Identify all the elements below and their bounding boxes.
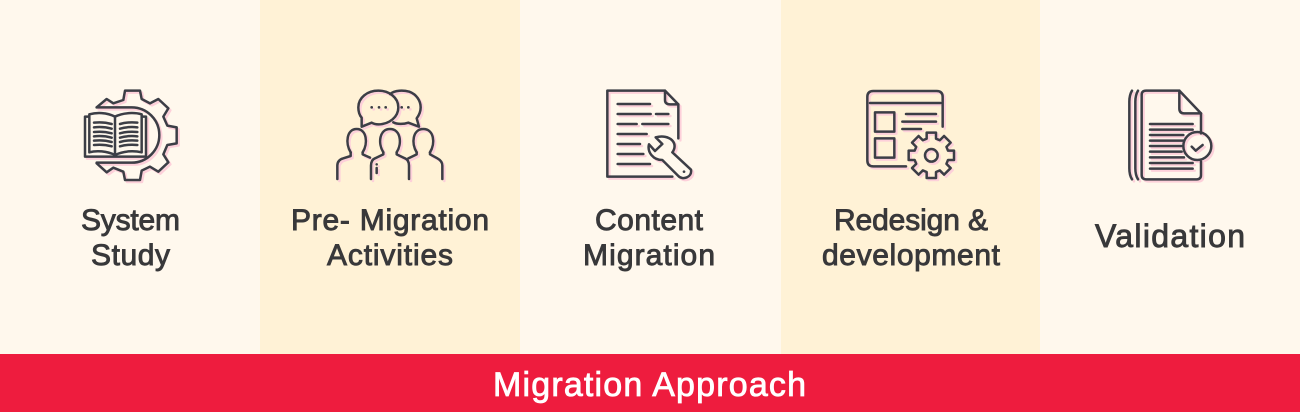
panel: pre-migration activities [260, 0, 520, 354]
heading: system study: Study [91, 239, 170, 272]
banner: migration approach: Migration Approach [493, 366, 806, 404]
heading: redesign and development [822, 204, 1001, 272]
panel: redesign and development [781, 0, 1040, 354]
icon: document with wrench [606, 89, 694, 182]
heading: pre-migration activities: Pre- Migration [291, 204, 489, 237]
heading: redesign and development: development [822, 239, 1001, 272]
icon: window layout with gear [866, 90, 958, 182]
heading: content migration [583, 204, 715, 272]
heading: pre-migration activities: Activities [327, 239, 453, 272]
heading: content migration: Migration [583, 239, 715, 272]
icon: book and gear [84, 89, 180, 184]
heading: system study: System [81, 204, 180, 237]
icon: documents with check badge [1128, 89, 1214, 183]
icon: people with speech bubbles [336, 89, 446, 182]
heading: pre-migration activities [291, 204, 489, 272]
panel: system study [0, 0, 260, 354]
heading: content migration: Content [595, 204, 704, 237]
heading: validation: Validation [1095, 218, 1245, 254]
banner: migration approach [0, 354, 1300, 412]
heading: redesign and development: Redesign & [834, 204, 988, 237]
panel: validation [1040, 0, 1300, 354]
heading: system study [81, 204, 180, 272]
panel: content migration [520, 0, 781, 354]
